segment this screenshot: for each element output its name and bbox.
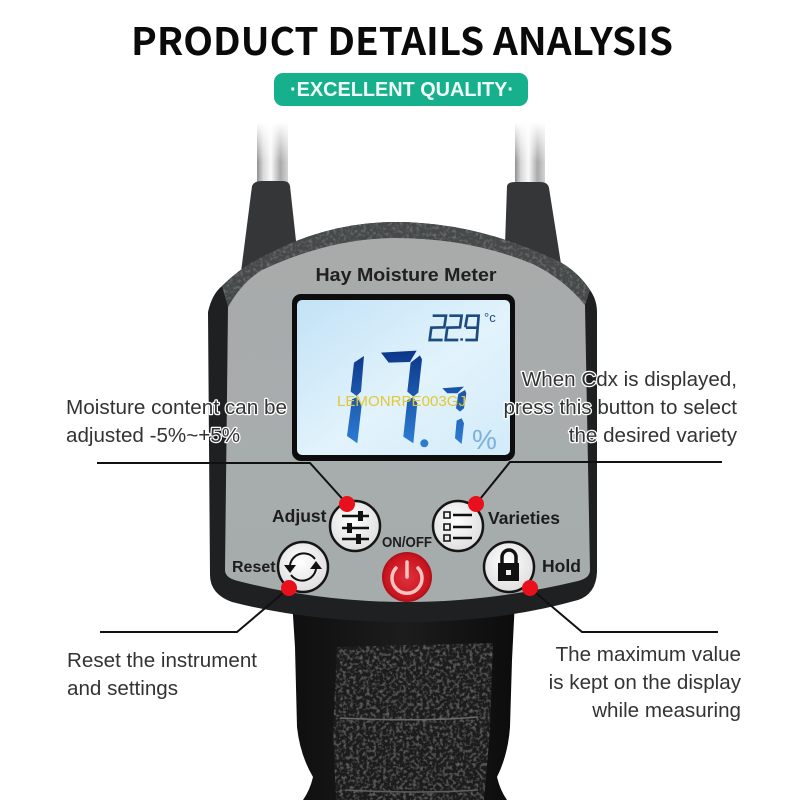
button: adjust	[272, 501, 380, 551]
callout text: hold: is kept on the display	[549, 671, 742, 694]
callout text: varieties: the desired variety	[569, 424, 738, 447]
callout text: varieties	[503, 368, 738, 447]
callout text: hold: The maximum value	[556, 643, 741, 666]
marker dots	[281, 496, 538, 596]
watermark: LEMONRPE003GJ	[337, 393, 466, 410]
callout line: varieties	[476, 462, 722, 504]
callout text: adjust: adjusted -5%~+5%	[66, 424, 240, 447]
button: on/off	[382, 534, 432, 602]
callout line: hold	[530, 588, 718, 632]
meter body	[208, 222, 597, 622]
callout text: adjust: Moisture content can be	[66, 396, 287, 419]
grip handle	[292, 600, 515, 800]
left probe rod	[255, 122, 290, 192]
badge: excellent quality	[274, 73, 528, 106]
left probe socket	[241, 181, 297, 272]
callout text: varieties: press this button to select	[503, 396, 737, 419]
temperature reading	[430, 310, 496, 341]
LCD screen	[292, 294, 515, 461]
callout text: hold: while measuring	[591, 699, 741, 722]
device name: Hay Moisture Meter	[316, 265, 496, 285]
callout text: adjust	[66, 396, 287, 447]
title: PRODUCT DETAILS ANALYSIS	[131, 11, 673, 66]
callout line: adjust	[97, 463, 347, 504]
right probe rod	[513, 122, 547, 192]
grey faceplate	[225, 238, 590, 602]
button: on/off: ON/OFF	[382, 534, 432, 551]
button: reset: Reset	[232, 559, 276, 576]
callout text: reset: and settings	[67, 677, 178, 700]
moisture reading	[347, 351, 497, 455]
moisture reading: %	[472, 424, 497, 455]
button: reset	[232, 542, 328, 592]
callout text: reset	[67, 649, 257, 700]
button: adjust: Adjust	[272, 506, 327, 526]
callout line: reset	[100, 588, 289, 632]
button: varieties: Varieties	[488, 508, 560, 528]
badge: excellent quality: ·EXCELLENT QUALITY·	[290, 79, 514, 101]
button: varieties	[433, 501, 560, 551]
button: hold	[484, 542, 581, 592]
temperature reading: °c	[484, 310, 496, 325]
button: hold: Hold	[542, 556, 581, 576]
callout text: reset: Reset the instrument	[67, 649, 257, 672]
right probe socket	[505, 182, 562, 270]
callout text: varieties: When Cdx is displayed,	[522, 368, 737, 391]
callout text: hold	[549, 643, 742, 722]
